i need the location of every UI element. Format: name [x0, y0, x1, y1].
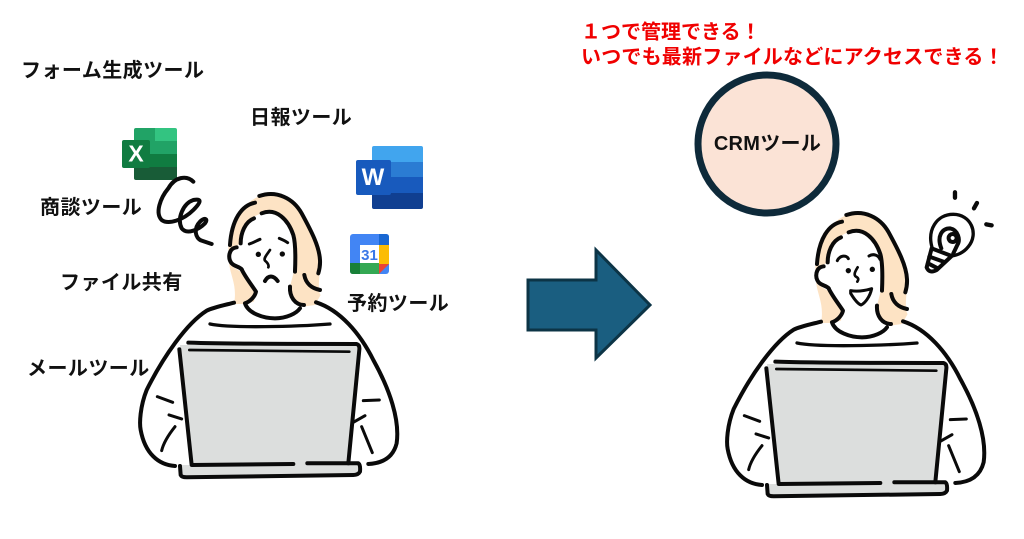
label: form generation tool: フォーム生成ツール: [21, 58, 204, 82]
icon: Excel: [122, 128, 177, 180]
icon: Word: [356, 146, 423, 209]
icon: Excel: X: [128, 140, 144, 166]
red headline: いつでも最新ファイルなどにアクセスできる！: [581, 46, 1004, 68]
worried face: [249, 238, 288, 281]
CRM tool circle: [698, 75, 836, 213]
label: booking tool: 予約ツール: [347, 292, 449, 315]
label: daily report tool: 日報ツール: [250, 106, 352, 129]
red headline: [581, 20, 1004, 68]
CRM tool circle: CRMツール: [714, 133, 821, 155]
icon: light bulb: [927, 192, 992, 271]
label: file sharing: ファイル共有: [60, 271, 183, 294]
icon: Word: W: [362, 164, 385, 191]
icon: Google Calendar: [350, 234, 389, 274]
icon: Google Calendar: 31: [361, 247, 378, 264]
red headline: １つで管理できる！: [581, 20, 761, 44]
icon: stress scribble: [159, 178, 212, 244]
happy woman at laptop: [727, 213, 984, 496]
arrow: [528, 250, 650, 358]
label: mail tool: メールツール: [27, 358, 150, 380]
label: meeting tool: 商談ツール: [40, 196, 142, 219]
happy face: [837, 255, 880, 305]
worried woman at laptop: [140, 194, 397, 477]
